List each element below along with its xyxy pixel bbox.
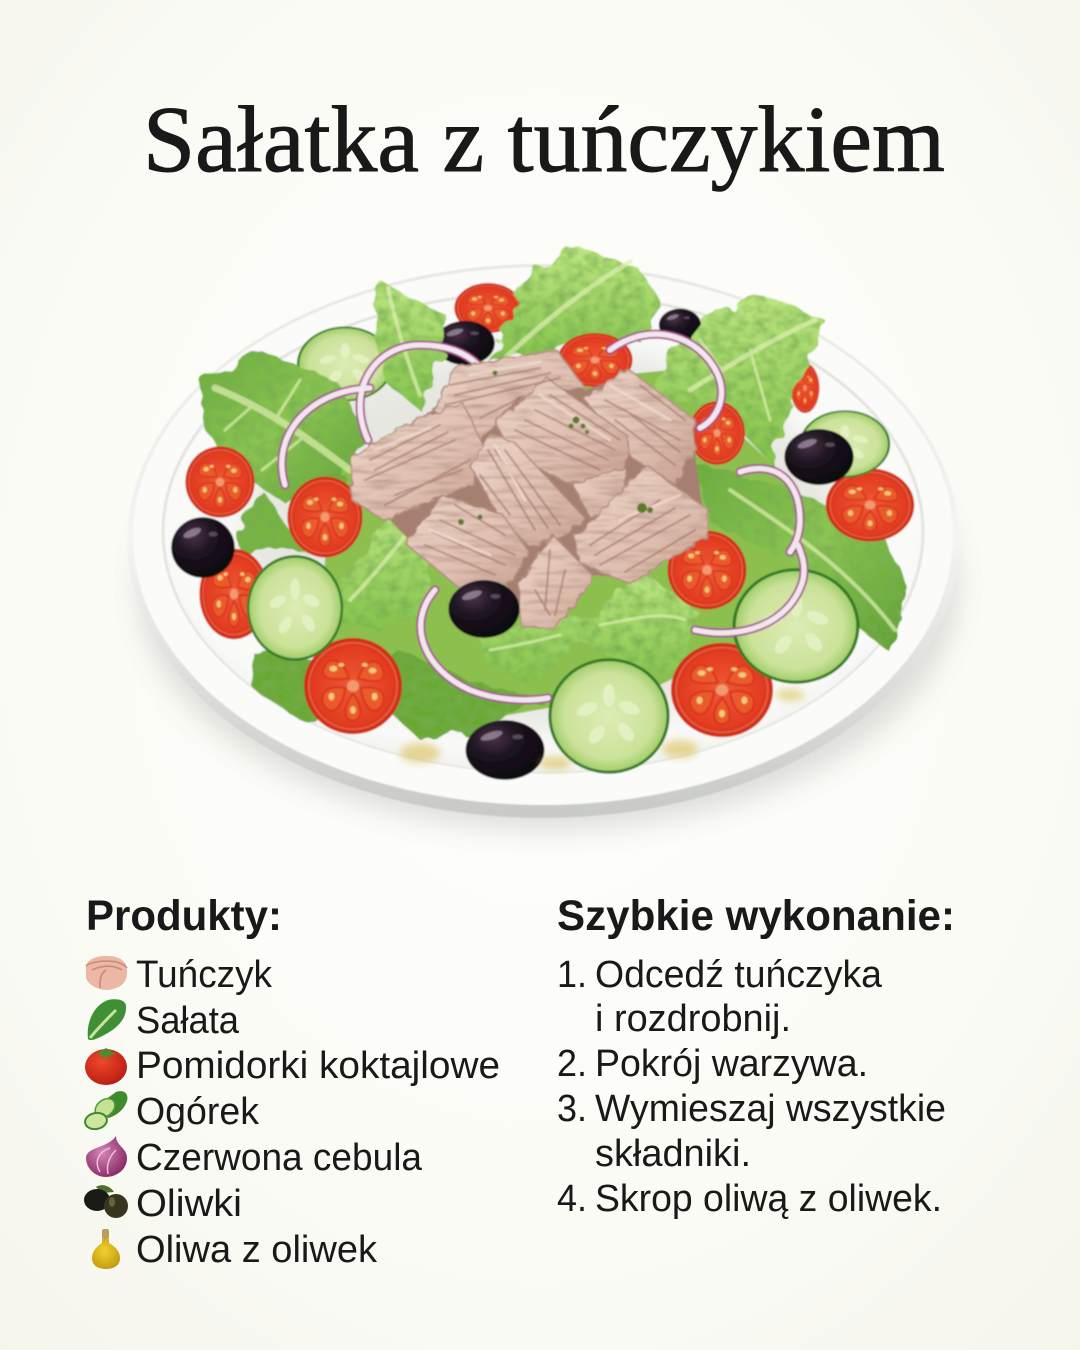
step 2: Pokrój warzywa. (595, 1043, 868, 1085)
step 1 (557, 954, 883, 1040)
title: Sałatka z tuńczykiem (143, 88, 945, 192)
cucumber slices (247, 410, 890, 774)
lettuce leaves (198, 247, 910, 740)
step 4: 4. (557, 1178, 587, 1220)
item: lettuce: Sałata (136, 1000, 240, 1042)
front olive (448, 580, 520, 638)
item: lettuce (88, 999, 240, 1042)
plate (127, 264, 959, 830)
step 3: Wymieszaj wszystkie (595, 1088, 946, 1130)
item: olive oil: Oliwa z oliwek (136, 1229, 378, 1271)
step 1: i rozdrobnij. (595, 998, 791, 1040)
tuna chunks (351, 350, 709, 630)
step 1: Odcedź tuńczyka (595, 954, 883, 996)
heading: quick preparation: Szybkie wykonanie: (557, 892, 955, 940)
item: cherry tomatoes: Pomidorki koktajlowe (136, 1045, 500, 1087)
item: cucumber: Ogórek (136, 1091, 260, 1133)
olives (171, 429, 854, 780)
step 2: 2. (557, 1043, 587, 1085)
oil droplets (400, 689, 804, 770)
panel: quick preparation (557, 892, 955, 1220)
panel: products (84, 892, 500, 1271)
step 3: składniki. (595, 1133, 751, 1175)
heading: products: Produkty: (86, 892, 282, 940)
step 3 (557, 1088, 946, 1175)
illustration: salad plate (127, 247, 959, 830)
item: tuna: Tuńczyk (136, 954, 273, 996)
back tomatoes, cucumber and olives (297, 283, 819, 413)
step 4: Skrop oliwą z oliwek. (595, 1178, 942, 1220)
step 1: 1. (557, 954, 587, 996)
halved cherry tomatoes (185, 333, 914, 737)
step 3: 3. (557, 1088, 587, 1130)
red onion rings (282, 334, 804, 700)
item: olives (84, 1183, 242, 1225)
item: olives: Oliwki (136, 1183, 242, 1225)
item: red onion: Czerwona cebula (136, 1137, 423, 1179)
